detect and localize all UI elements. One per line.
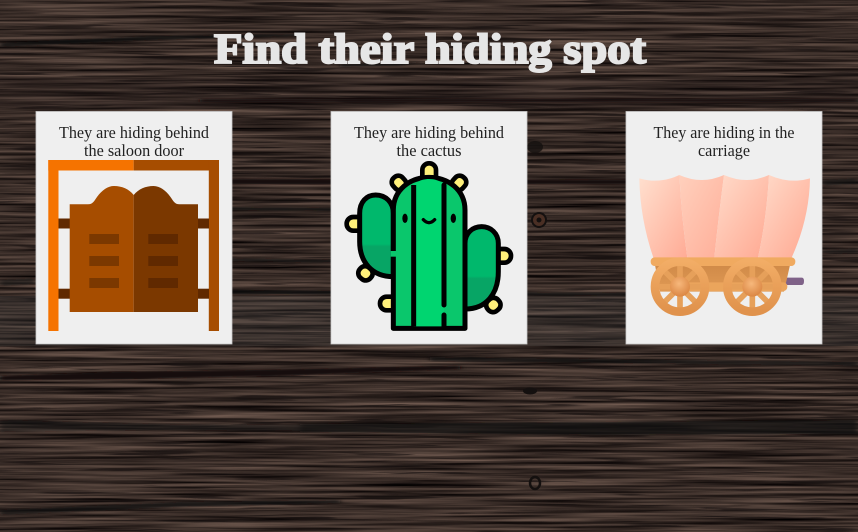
text: cactus caption	[354, 123, 505, 160]
text: saloon door caption: They are hiding behind	[59, 123, 210, 142]
text: carriage caption: They are hiding in the	[654, 123, 794, 142]
icon: saloon door	[48, 160, 219, 331]
text: carriage caption: carriage	[698, 141, 750, 160]
text: cactus caption: the cactus	[396, 141, 462, 160]
text: carriage caption	[654, 123, 794, 160]
text: saloon door caption: the saloon door	[84, 141, 184, 160]
icon: cactus	[347, 163, 511, 328]
text: cactus caption: They are hiding behind	[354, 123, 505, 142]
icon: carriage	[639, 175, 810, 312]
text: saloon door caption	[59, 123, 210, 160]
panel: saloon door	[36, 112, 232, 344]
panel: carriage	[626, 112, 822, 344]
panel: cactus	[331, 112, 527, 344]
title: Find their hiding spot	[214, 27, 646, 73]
